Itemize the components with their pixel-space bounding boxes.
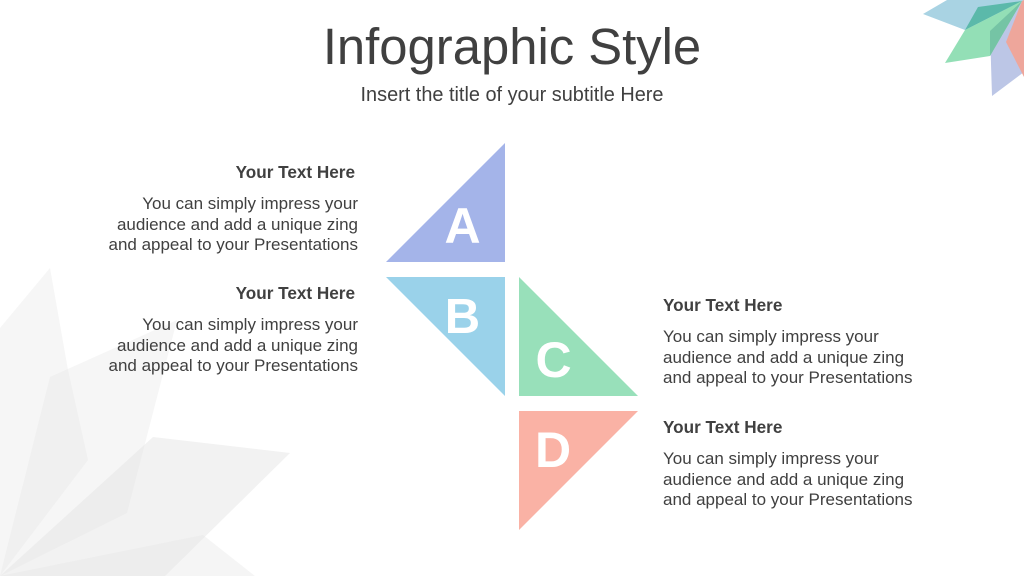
text block A (108, 162, 358, 254)
triangle B (386, 277, 505, 396)
title: Infographic Style (323, 18, 701, 75)
body B: and appeal to your Presentations (108, 356, 358, 375)
subtitle: Insert the title of your subtitle Here (361, 84, 663, 106)
body D: audience and add a unique zing (663, 470, 904, 489)
triangle C: C (535, 332, 572, 388)
body C: audience and add a unique zing (663, 348, 904, 367)
triangle A: A (444, 198, 481, 254)
body D: and appeal to your Presentations (663, 490, 913, 509)
body D: You can simply impress your (663, 449, 879, 468)
body A (108, 194, 358, 254)
triangle C (519, 277, 638, 396)
triangle A (386, 143, 505, 262)
body D (663, 449, 913, 509)
heading D: Your Text Here (663, 417, 782, 437)
text block B (108, 283, 358, 375)
body B (108, 315, 358, 375)
triangle D (519, 411, 638, 530)
body A: audience and add a unique zing (117, 215, 358, 234)
body C: You can simply impress your (663, 327, 879, 346)
heading C: Your Text Here (663, 295, 782, 315)
heading B: Your Text Here (236, 283, 355, 303)
body B: You can simply impress your (142, 315, 358, 334)
body A: You can simply impress your (142, 194, 358, 213)
heading A: Your Text Here (236, 162, 355, 182)
triangle D: D (535, 422, 571, 478)
body C: and appeal to your Presentations (663, 368, 913, 387)
body C (663, 327, 913, 387)
text block C (663, 295, 913, 387)
body B: audience and add a unique zing (117, 336, 358, 355)
text block D (663, 417, 913, 509)
triangle B: B (445, 290, 480, 344)
body A: and appeal to your Presentations (108, 235, 358, 254)
